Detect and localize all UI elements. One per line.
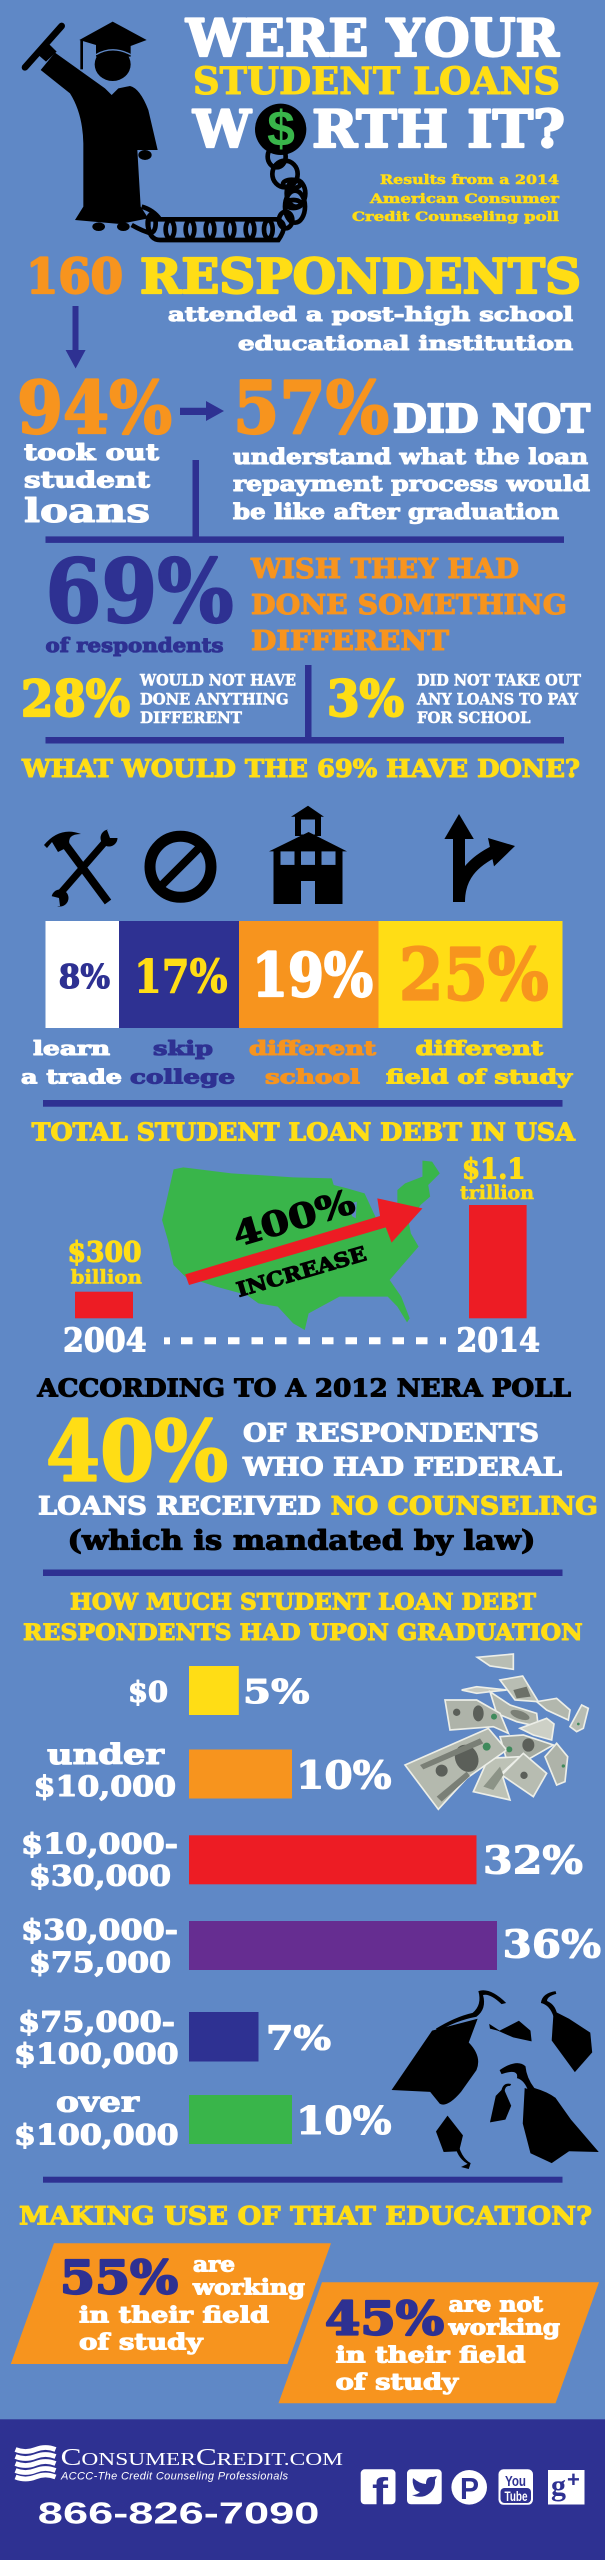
row: $10,000-$30,000: $10,000-	[21, 1828, 178, 1860]
row: $0: 5%	[243, 1672, 309, 1711]
callout: 55% working in field of study: of study	[79, 2329, 204, 2355]
bar labels	[21, 1036, 574, 1089]
arrow: down to 94%	[66, 306, 86, 368]
stat: 69% wish they had done something different: DIFFERENT	[251, 626, 449, 657]
stat: 94% took out student loans: loans	[24, 491, 150, 530]
map of USA with 400% increase arrow	[162, 1161, 440, 1330]
title: $	[267, 101, 295, 157]
logo wordmark: C ONSUMER C REDIT.COM	[61, 2445, 343, 2471]
stat: 94% took out student loans: took out	[24, 440, 160, 466]
title: WERE YOUR	[185, 9, 560, 69]
stat: 28% would not have done anything different: DIFFERENT	[140, 708, 242, 727]
callout: 55% working in field of study: 55%	[60, 2250, 178, 2304]
row: $10,000-$30,000	[21, 1828, 583, 1892]
160 respondents heading: RESPONDENTS	[140, 249, 581, 305]
bar labels: college	[130, 1065, 235, 1089]
bar labels: a trade	[21, 1065, 122, 1089]
poll source note: American Consumer	[369, 192, 559, 207]
callout: 55% working in field of study: in their field	[79, 2303, 269, 2329]
bar labels: different	[249, 1036, 377, 1060]
callout: 45% not working in field of study: of study	[336, 2369, 459, 2395]
bar labels: school	[265, 1065, 361, 1089]
stat: 69% wish they had done something different: 69%	[46, 540, 234, 643]
stat: 40% received no counseling: OF RESPONDENTS	[243, 1419, 539, 1448]
bar chart: debt upon graduation	[14, 1666, 601, 2152]
stacked bar chart: what the 69% would have done: 25%	[399, 933, 549, 1017]
stat: 28% would not have done anything different: WOULD NOT HAVE	[139, 671, 296, 690]
row: $30,000-$75,000: $75,000	[29, 1946, 171, 1979]
2014 debt column: 2014	[456, 1321, 540, 1360]
stat: 28% would not have done anything different: 28%	[21, 669, 130, 728]
row: $0: $0	[128, 1676, 168, 1709]
icon: prohibition sign	[150, 836, 211, 897]
2014 debt column	[456, 1152, 540, 1360]
icon: youtube: Tube	[504, 2488, 528, 2504]
icon: google plus: g	[551, 2469, 566, 2502]
row: under $10,000	[34, 1738, 392, 1803]
stacked bar chart: what the 69% would have done	[46, 921, 562, 1028]
heading: total student loan debt: TOTAL STUDENT LOAN DEBT IN USA	[32, 1118, 575, 1147]
attended text: educational institution	[238, 331, 574, 355]
row: $10,000-$30,000: $30,000	[29, 1860, 171, 1892]
poll source note: Results from a 2014	[380, 173, 559, 188]
callout: 45% not working in field of study: 45%	[325, 2291, 444, 2345]
stat: 69% wish they had done something different: WISH THEY HAD	[250, 554, 519, 585]
callout: 55% working in field of study: are	[193, 2252, 235, 2277]
row: $75,000-$100,000: 7%	[266, 2019, 331, 2058]
stat: 57% did not understand: be like after graduation	[233, 499, 559, 524]
row: $30,000-$75,000	[21, 1914, 601, 1979]
stat: 94% took out student loans: student	[24, 468, 151, 494]
poll source note: Credit Counseling poll	[352, 210, 559, 225]
poll source note	[352, 173, 559, 225]
callout: 45% not working in field of study	[278, 2282, 599, 2403]
stat: 40% received no counseling: 40%	[46, 1403, 228, 1501]
bar labels: skip	[153, 1036, 213, 1060]
icon: pinterest: P	[460, 2471, 479, 2506]
stat: 94% took out student loans	[17, 365, 172, 530]
2014 debt column: $1.1	[462, 1152, 526, 1185]
heading: what would the 69% have done: WHAT WOULD THE 69% HAVE DONE?	[21, 754, 580, 783]
row: under $10,000: under	[47, 1738, 166, 1771]
logo tagline: ACCC-The Credit Counseling Professionals	[60, 2470, 288, 2482]
title	[185, 9, 565, 160]
stat: 57% did not understand: DID NOT	[393, 397, 590, 442]
title: W	[192, 100, 252, 160]
stat: 57% did not understand: 57%	[233, 365, 389, 450]
2004 debt column: $300	[68, 1236, 142, 1269]
icon: google plus: +	[567, 2467, 580, 2492]
row: over $100,000: $100,000	[14, 2118, 179, 2152]
footer band	[0, 2419, 605, 2560]
row: $10,000-$30,000: 32%	[483, 1838, 583, 1883]
title: RTH IT?	[312, 100, 565, 160]
stat: 40% received no counseling	[38, 1403, 598, 1556]
heading: making use of that education: MAKING USE OF THAT EDUCATION?	[19, 2201, 592, 2230]
stat: 3% did not take out loans: ANY LOANS TO PAY	[416, 689, 579, 708]
stacked bar chart: what the 69% would have done: 17%	[134, 950, 228, 1004]
stat: 3% did not take out loans: 3%	[327, 669, 404, 728]
heading: NERA poll: ACCORDING TO A 2012 NERA POLL	[36, 1374, 571, 1403]
arrow: right to 57%	[180, 401, 224, 421]
row: $30,000-$75,000: 36%	[503, 1922, 601, 1966]
row: over $100,000: over	[56, 2086, 141, 2119]
icon: twitter	[407, 2469, 442, 2504]
phone number: 866-826-7090	[38, 2495, 319, 2530]
row: over $100,000: 10%	[296, 2098, 392, 2143]
stat: 3% did not take out loans	[327, 669, 581, 728]
2004 debt column: billion	[71, 1266, 142, 1288]
stat: 3% did not take out loans: DID NOT TAKE OUT	[417, 671, 581, 690]
stat: 69% wish they had done something different: DONE SOMETHING	[251, 590, 567, 621]
illustration: falling dollar bills	[405, 1654, 588, 1809]
callout: 45% not working in field of study: working	[448, 2314, 560, 2339]
stacked bar chart: what the 69% would have done: 8%	[59, 957, 110, 996]
callout: 45% not working in field of study: in their field	[336, 2343, 526, 2369]
2004 debt column: 2004	[63, 1321, 147, 1360]
icon: forking arrow	[444, 814, 515, 902]
illustration: tossed graduation caps	[392, 1990, 599, 2169]
row: under $10,000: $10,000	[34, 1770, 176, 1803]
stat: 40% received no counseling: WHO HAD FEDERAL	[242, 1453, 562, 1482]
stat: 69% wish they had done something different	[46, 540, 567, 657]
icon: hammer and wrench	[44, 826, 118, 906]
2014 debt column: trillion	[460, 1182, 534, 1204]
stat: 40% received no counseling: NO COUNSELING	[331, 1491, 598, 1520]
stat: 57% did not understand: understand what the loan	[233, 444, 588, 469]
icon: youtube	[498, 2469, 533, 2505]
heading: debt upon graduation: RESPONDENTS HAD UPON GRADUATION	[23, 1620, 583, 1646]
title: STUDENT LOANS	[193, 59, 560, 103]
icon: google plus	[548, 2467, 584, 2504]
stat: 57% did not understand: repayment process would	[233, 471, 590, 496]
icon: facebook	[361, 2469, 396, 2513]
bar labels: field of study	[386, 1065, 574, 1089]
stat: 69% wish they had done something different: of respondents	[46, 633, 224, 657]
icon: ConsumerCredit wave logo	[16, 2448, 56, 2479]
row: $0	[128, 1666, 309, 1715]
heading: debt upon graduation	[23, 1590, 583, 1646]
stat: 94% took out student loans: 94%	[17, 365, 172, 450]
icon: facebook: f	[372, 2471, 388, 2513]
icon: youtube: You	[505, 2473, 526, 2490]
icon: schoolhouse	[269, 806, 347, 904]
row: over $100,000	[14, 2086, 392, 2152]
callout: 45% not working in field of study: are not	[449, 2292, 543, 2317]
row: $75,000-$100,000: $75,000-	[18, 2005, 175, 2038]
stat: 3% did not take out loans: FOR SCHOOL	[417, 708, 530, 727]
bar labels: different	[416, 1036, 544, 1060]
heading: debt upon graduation: HOW MUCH STUDENT LOAN DEBT	[70, 1590, 536, 1616]
160 respondents heading: 160	[26, 249, 123, 305]
map of USA with 400% increase arrow: INCREASE	[234, 1241, 369, 1302]
attended text	[168, 302, 574, 355]
row: $75,000-$100,000: $100,000	[14, 2038, 179, 2070]
stat: 28% would not have done anything different	[21, 669, 296, 728]
icon: pinterest	[451, 2470, 487, 2506]
stat: 28% would not have done anything different: DONE ANYTHING	[140, 689, 289, 708]
callout: 55% working in field of study: working	[192, 2274, 305, 2299]
bar labels: learn	[33, 1036, 111, 1060]
map of USA with 400% increase arrow: 400%	[228, 1182, 360, 1256]
row: $30,000-$75,000: $30,000-	[21, 1914, 178, 1947]
attended text: attended a post-high school	[168, 302, 574, 326]
callout: 55% working in field of study	[11, 2243, 331, 2364]
stat: 40% received no counseling: LOANS RECEIVED	[38, 1491, 321, 1520]
stat: 57% did not understand	[233, 365, 590, 524]
row: $75,000-$100,000	[14, 2005, 331, 2070]
2004 debt column	[63, 1236, 147, 1360]
row: under $10,000: 10%	[296, 1753, 392, 1798]
icon: graduate chained to a dollar ball	[25, 22, 306, 240]
stat: 40% received no counseling: (which is mandated by law)	[68, 1525, 536, 1556]
stacked bar chart: what the 69% would have done: 19%	[252, 941, 373, 1011]
